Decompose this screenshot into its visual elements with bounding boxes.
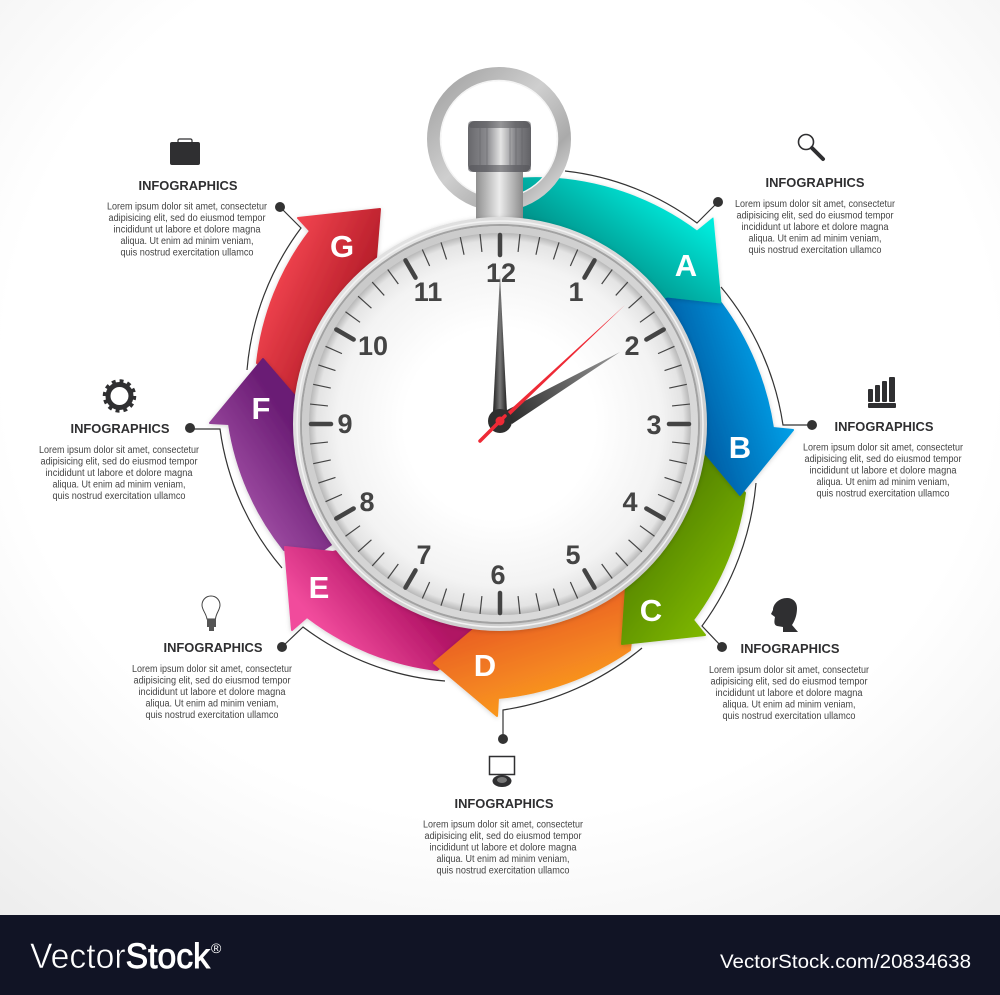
heading: INFOGRAPHICS [164,640,263,655]
body text: aliqua. Ut enim ad minim veniam, [120,236,254,247]
hour numbers: 4 [622,487,638,517]
info block: B [803,377,964,500]
info block: C [709,598,870,722]
footer image id: VectorStock.com/20834638 [720,951,971,973]
body text: quis nostrud exercitation ullamco [748,245,882,256]
body text: quis nostrud exercitation ullamco [120,248,254,258]
arrow A: A [675,248,697,283]
hub [480,409,512,441]
icon: head silhouette [771,598,798,632]
crown cap [468,121,531,172]
body text: quis nostrud exercitation ullamco [816,488,950,500]
arrow C: C [640,593,662,628]
hour numbers: 10 [358,331,388,361]
hour numbers: 11 [414,277,442,307]
arrow E: E [309,570,329,605]
connector: C [702,483,756,652]
hour numbers: 7 [416,540,432,570]
arrow B [640,297,793,495]
body text: adipisicing elit, sed do eiusmod tempor [710,676,868,688]
body text: aliqua. Ut enim ad minim veniam, [748,234,882,244]
pull ring [434,74,564,204]
body text: incididunt ut labore et dolore magna [810,466,957,476]
registered mark: ® [211,940,222,956]
hour numbers: 8 [359,487,375,517]
minor ticks [310,234,690,614]
arrow D: D [474,648,496,683]
body text: incididunt ut labore et dolore magna [138,687,286,698]
hour numbers: 1 [568,277,584,307]
crown stem [476,170,523,220]
arrow D [434,560,640,716]
info block: A [735,134,896,256]
icon: magnifier [798,134,823,159]
body text: aliqua. Ut enim ad minim veniam, [816,477,950,488]
body text: Lorem ipsum dolor sit amet, consectetur [423,820,584,830]
heading: INFOGRAPHICS [70,421,170,436]
arrow A [523,178,721,310]
body text: Lorem ipsum dolor sit amet, consectetur [803,442,964,454]
body text [709,665,870,722]
body text: quis nostrud exercitation ullamco [436,866,570,876]
body text [423,820,584,876]
body text: incididunt ut labore et dolore magna [114,224,261,236]
body text: quis nostrud exercitation ullamco [146,710,279,721]
connector: D [498,648,642,744]
heading: INFOGRAPHICS [834,419,934,434]
body text: adipisicing elit, sed do eiusmod tempor [134,676,291,686]
arrow F [210,359,345,552]
body text: quis nostrud exercitation ullamco [722,711,856,722]
body text: aliqua. Ut enim ad minim veniam, [52,480,186,490]
second hand [499,305,625,423]
body text: Lorem ipsum dolor sit amet, consectetur [39,445,200,456]
body text: quis nostrud exercitation ullamco [52,491,186,502]
body text: adipisicing elit, sed do eiusmod tempor [804,454,962,465]
metal bezel [293,217,707,631]
hour numbers [337,258,662,590]
hour numbers: 6 [490,560,506,590]
major ticks [311,235,689,613]
body text [39,445,200,502]
body text: Lorem ipsum dolor sit amet, consectetur [709,665,870,676]
stopwatch [293,74,707,631]
body text: adipisicing elit, sed do eiusmod tempor [40,456,198,468]
hour numbers: 2 [624,331,640,361]
hour numbers: 5 [565,540,581,570]
minute hand [493,275,507,412]
arrow G: G [330,229,354,264]
body text: aliqua. Ut enim ad minim veniam, [436,854,570,865]
body text: aliqua. Ut enim ad minim veniam, [722,700,856,710]
info block: G [107,139,268,258]
icon: gear [104,381,134,411]
callout connector lines [185,171,817,744]
footer bar [0,915,1000,995]
body text: adipisicing elit, sed do eiusmod tempor [108,213,266,224]
icon: light bulb [202,596,220,631]
connector: G [247,202,301,370]
connector: E [277,627,445,681]
icon: monitor [490,756,514,787]
body text: incididunt ut labore et dolore magna [430,842,577,854]
connector: A [565,171,723,223]
info block: E [132,596,293,721]
body text [107,202,268,258]
info block: F [39,381,200,502]
arrow C [622,453,745,644]
body text: Lorem ipsum dolor sit amet, consectetur [735,199,896,210]
body text: aliqua. Ut enim ad minim veniam, [146,698,278,710]
hour numbers: 9 [337,409,353,439]
icon: briefcase [170,139,200,165]
connector: F [185,423,282,568]
heading: INFOGRAPHICS [766,175,865,190]
body text: Lorem ipsum dolor sit amet, consectetur [132,664,293,675]
body text: adipisicing elit, sed do eiusmod tempor [736,210,894,222]
body text: incididunt ut labore et dolore magna [716,688,863,699]
body text: Lorem ipsum dolor sit amet, consectetur [107,202,268,212]
clock face [309,233,691,615]
footer logo: VectorStock [30,937,210,976]
arrow G [257,209,420,420]
hour numbers: 12 [486,258,516,288]
icon: bar chart [868,377,896,408]
connector: B [721,287,817,430]
heading: INFOGRAPHICS [454,796,554,811]
body text: incididunt ut labore et dolore magna [46,468,193,479]
hour hand [505,352,620,424]
body text [735,199,896,256]
body text: adipisicing elit, sed do eiusmod tempor [424,831,582,842]
arrow B: B [729,430,751,465]
heading: INFOGRAPHICS [740,641,840,656]
arrow E [285,540,490,670]
body text: incididunt ut labore et dolore magna [742,222,889,233]
body text [132,664,293,721]
info block: D [423,756,584,876]
arrow F: F [252,391,270,426]
hour numbers: 3 [646,410,662,440]
body text [803,442,964,500]
heading: INFOGRAPHICS [138,178,238,193]
